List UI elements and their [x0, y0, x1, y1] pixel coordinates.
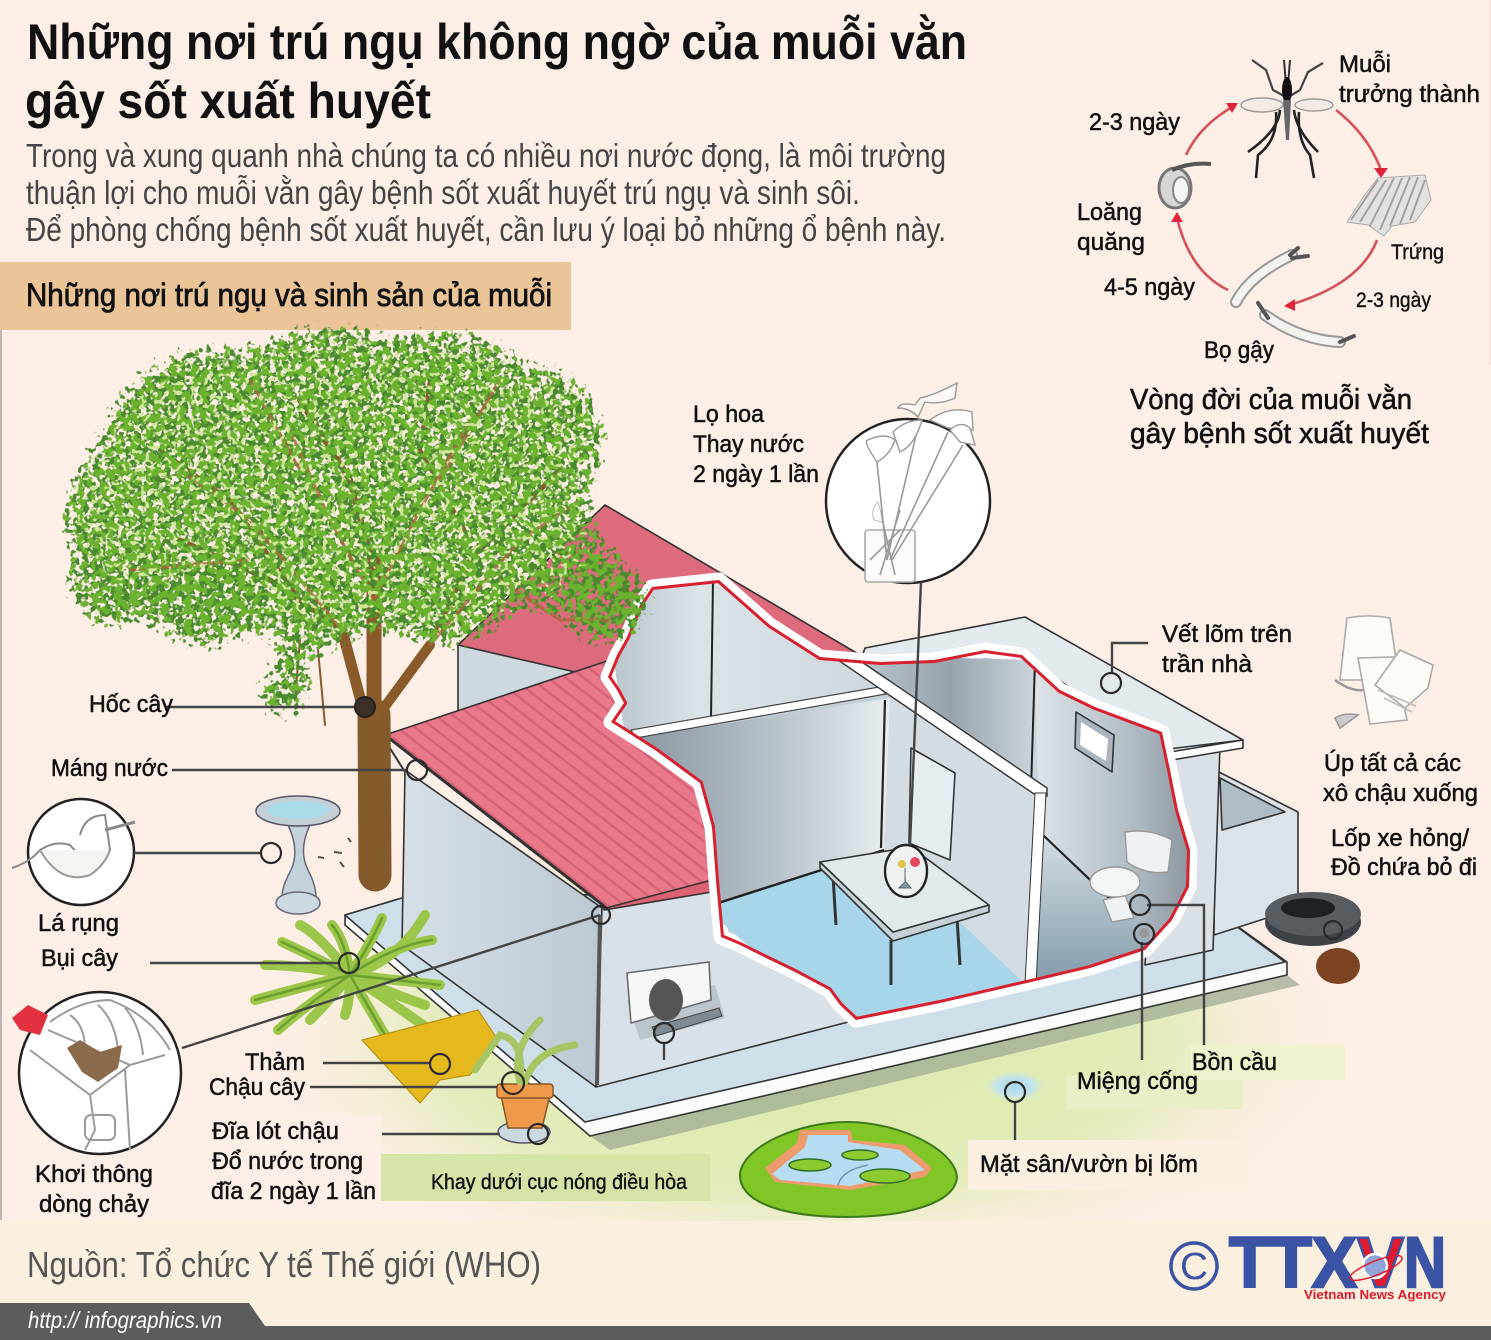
bottom bar with url — [0, 1303, 1491, 1340]
downpipe — [597, 915, 600, 1085]
intro text — [26, 137, 946, 248]
right wall — [1145, 745, 1220, 965]
icon: buckets — [1335, 616, 1433, 728]
cycle stage labels: Loăng — [1077, 199, 1142, 226]
icon: larvae — [1236, 248, 1354, 342]
house callout labels: xô chậu xuống — [1323, 780, 1478, 807]
house callout labels: Bụi cây — [41, 945, 118, 972]
table — [820, 847, 989, 985]
title — [25, 14, 967, 129]
target markers — [261, 673, 1342, 1144]
pink main roof — [385, 660, 712, 908]
cycle stage labels: 2-3 ngày — [1356, 289, 1431, 312]
house callout labels: Mặt sân/vườn bị lõm — [980, 1151, 1198, 1178]
house callout labels: Đổ nước trong — [212, 1148, 363, 1175]
back wing wall — [458, 600, 600, 712]
life cycle caption — [1130, 383, 1429, 450]
footer band — [0, 1221, 1491, 1326]
intro text: Trong và xung quanh nhà chúng ta có nhiều nơi nước đọng, là môi trường — [26, 137, 946, 174]
foliage highlights — [53, 315, 615, 658]
house callout labels: dòng chảy — [39, 1191, 149, 1218]
source text: Nguồn: Tổ chức Y tế Thế giới (WHO) — [27, 1244, 541, 1285]
twigs — [130, 380, 610, 645]
logo: TTXVN: V — [1357, 1224, 1404, 1303]
icon: shrub — [255, 915, 440, 1035]
foliage dark — [53, 315, 660, 728]
icon: pond — [740, 1122, 957, 1217]
house callout labels: Đĩa lót chậu — [212, 1118, 339, 1145]
table vase target — [885, 845, 927, 897]
icon: circle fallen leaves — [12, 799, 135, 905]
icon: shrub midribs — [255, 918, 440, 1035]
tyre — [1265, 892, 1361, 946]
icon: eggs — [1347, 175, 1431, 236]
foundation slab — [345, 885, 1287, 1136]
house illustration — [345, 505, 1361, 1150]
house callout labels: Máng nước — [51, 755, 168, 782]
foliage mid — [53, 315, 660, 728]
title: Những nơi trú ngụ không ngờ của muỗi vằn — [27, 14, 967, 70]
icon: bird bath — [256, 796, 351, 914]
pink front gable — [604, 732, 712, 910]
ground: lawn — [240, 800, 1360, 1280]
house interior — [600, 570, 1200, 1035]
house callout labels: Khơi thông — [35, 1161, 153, 1188]
icon: adult mosquito — [1241, 60, 1333, 178]
icon: yellow mat — [362, 1010, 498, 1103]
logo: TTXVN: N — [1404, 1224, 1446, 1303]
leader lines — [134, 582, 1204, 1140]
house callout labels: Bồn cầu — [1192, 1049, 1277, 1076]
coconut shell — [1316, 948, 1360, 984]
label backgrounds — [197, 1045, 1345, 1215]
back roof — [458, 505, 860, 680]
cycle stage labels: quăng — [1077, 229, 1145, 256]
left outer wall — [402, 770, 602, 1087]
trunk and branches — [160, 380, 560, 875]
house callout labels: Chậu cây — [209, 1074, 305, 1101]
logo: TTXVN — [1171, 1224, 1447, 1303]
logo: TTXVN: C — [1180, 1246, 1208, 1288]
mosquito life cycle — [1077, 51, 1480, 364]
section heading — [0, 262, 571, 330]
right annex box — [1214, 770, 1298, 935]
icon: circle gutter — [12, 992, 181, 1154]
house callout labels: Lốp xe hỏng/ — [1331, 825, 1469, 852]
icon: potted plant — [475, 1020, 575, 1143]
icon: ground puddle — [983, 1070, 1047, 1102]
house callout labels: Miệng cống — [1077, 1068, 1198, 1095]
life cycle caption: Vòng đời của muỗi vằn — [1130, 383, 1412, 416]
cycle stage labels: 4-5 ngày — [1104, 274, 1195, 301]
cycle stage labels: Bọ gậy — [1204, 337, 1274, 364]
air conditioner — [627, 962, 725, 1040]
cycle stage labels: Muỗi — [1339, 51, 1391, 78]
intro text: Để phòng chống bệnh sốt xuất huyết, cần lưu ý loại bỏ những ổ bệnh này. — [26, 211, 946, 248]
right roof — [860, 617, 1243, 760]
cycle stage labels: Trứng — [1391, 241, 1444, 264]
toilet — [1090, 831, 1172, 922]
front outer wall — [596, 890, 856, 1087]
house callout labels — [35, 401, 1478, 1218]
title: gây sốt xuất huyết — [25, 73, 431, 129]
floor drain — [1139, 928, 1149, 938]
house callout labels: 2 ngày 1 lần — [693, 461, 819, 488]
logo: TTXVN: Vietnam News Agency — [1304, 1287, 1447, 1302]
cycle arrows — [1177, 106, 1381, 306]
house callout labels: Đồ chứa bỏ đi — [1331, 854, 1477, 881]
tree — [53, 315, 660, 875]
section heading: Những nơi trú ngụ và sinh sản của muỗi — [26, 277, 552, 313]
red cut line — [608, 580, 1190, 1020]
window — [1075, 712, 1114, 772]
house callout labels: Lọ hoa — [693, 401, 765, 428]
house callout labels: đĩa 2 ngày 1 lần — [211, 1178, 376, 1205]
house callout labels: Khay dưới cục nóng điều hòa — [431, 1171, 687, 1194]
house callout labels: Hốc cây — [89, 691, 173, 718]
logo: TTXVN: TTX — [1229, 1224, 1357, 1303]
house callout labels: Thay nước — [693, 431, 804, 458]
bottom bar with url: http:// infographics.vn — [28, 1307, 222, 1333]
house callout labels: Thảm — [245, 1049, 305, 1076]
cycle stage labels: trưởng thành — [1339, 81, 1480, 108]
icon: circle vase flowers — [826, 383, 990, 583]
life cycle caption: gây bệnh sốt xuất huyết — [1130, 418, 1429, 450]
intro text: thuận lợi cho muỗi vằn gây bệnh sốt xuất huyết trú ngụ và sinh sôi. — [26, 174, 860, 211]
house callout labels: Úp tất cả các — [1324, 750, 1461, 777]
icon: pupa — [1159, 164, 1211, 208]
cycle stage labels: 2-3 ngày — [1089, 109, 1180, 136]
white cutaway edge — [608, 580, 1190, 1020]
slab shadow — [590, 975, 1300, 1150]
cycle stage labels — [1077, 51, 1480, 364]
house callout labels: Lá rụng — [38, 910, 119, 937]
house callout labels: Vết lõm trên — [1162, 621, 1292, 648]
house callout labels: trần nhà — [1162, 651, 1253, 678]
